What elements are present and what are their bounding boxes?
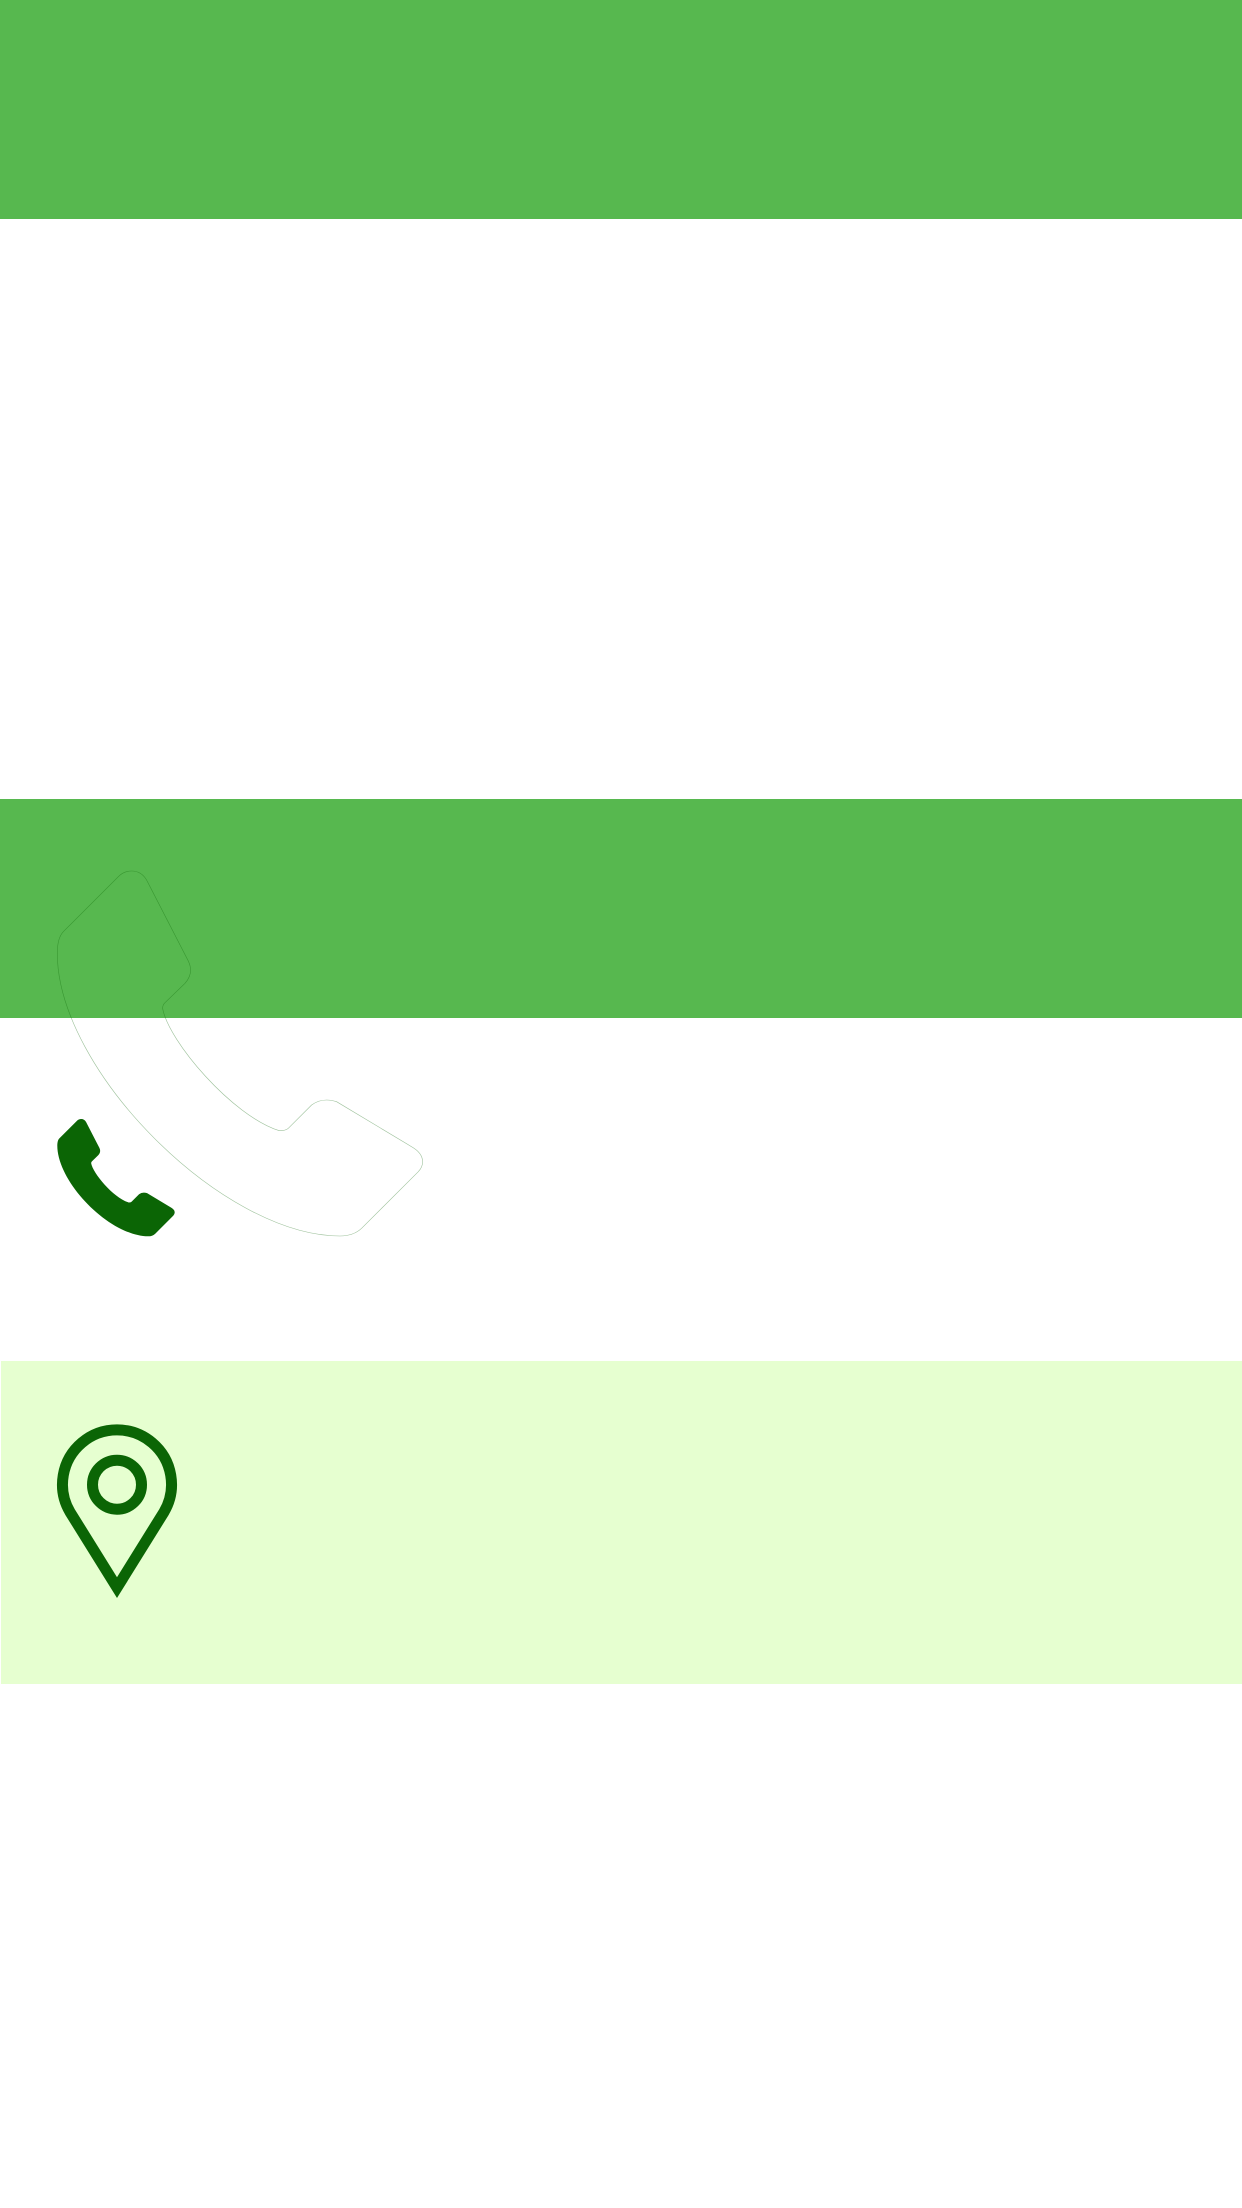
icon: large phone outline [57,871,423,1236]
middle green band [0,799,1242,1018]
icon: small solid phone [57,1119,175,1236]
icon: map pin [62,1430,172,1588]
top green band [0,0,1242,219]
pale green address panel [1,1361,1242,1684]
